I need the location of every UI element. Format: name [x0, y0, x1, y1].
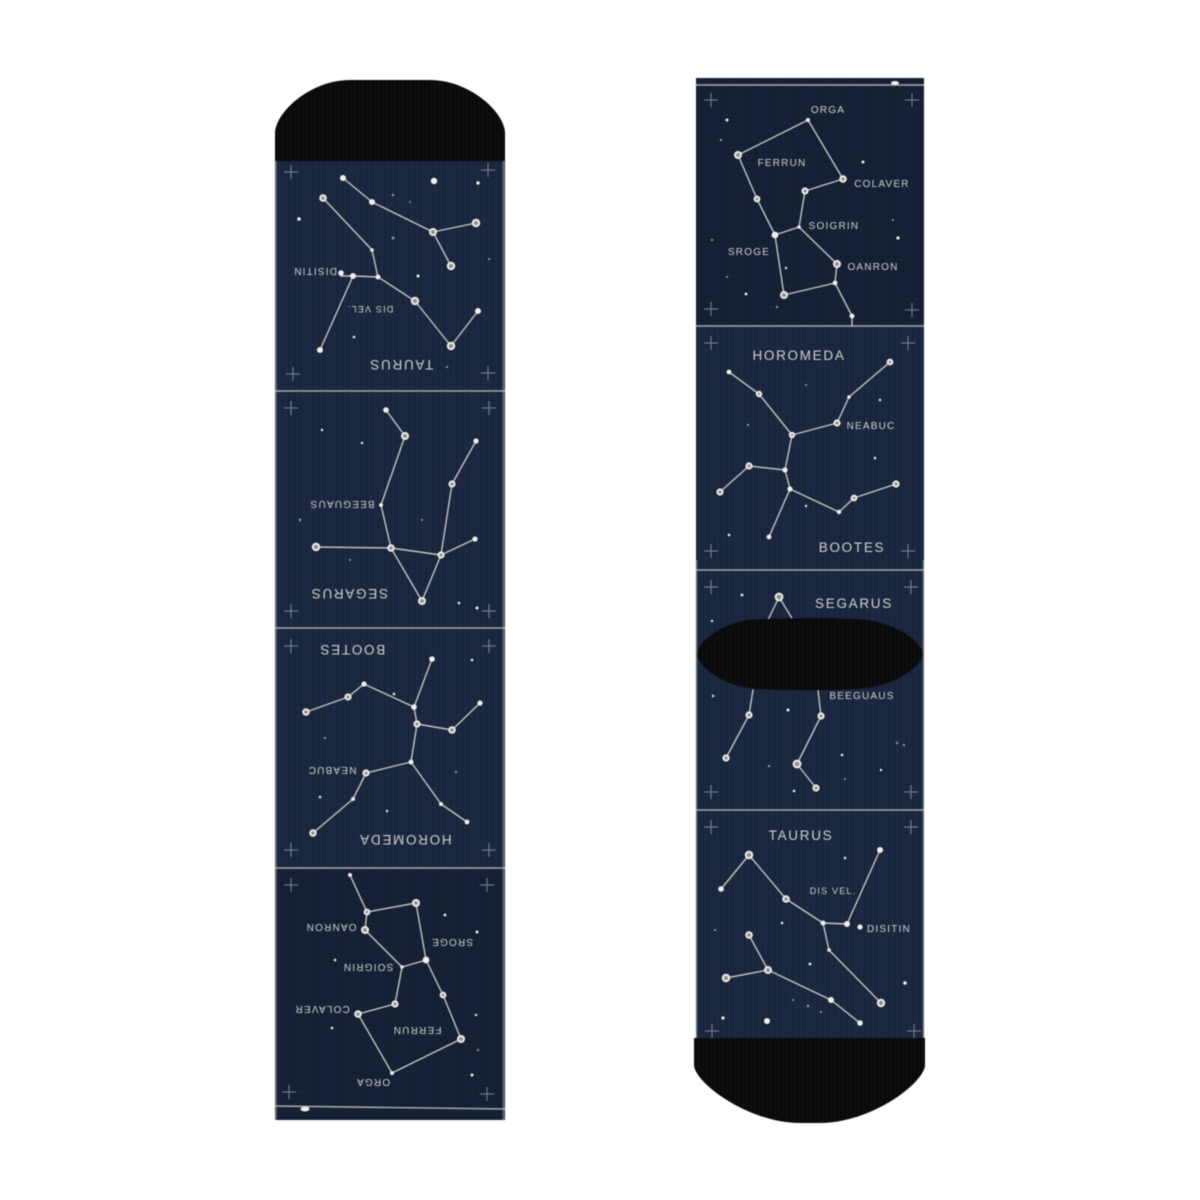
constellation panel: Orga (left sock): FERRUN	[393, 1024, 441, 1035]
constellation panel: Taurus (left sock): TAURUS	[369, 357, 433, 372]
alignment crosses: right sock	[704, 93, 921, 1038]
constellation panel: Taurus (right sock): DIS VEL.	[810, 886, 856, 896]
black toe cap: left sock	[275, 80, 505, 161]
constellation panel: Segarus (right sock): BEEGUAUS	[829, 691, 895, 702]
constellation panel: Orga (right sock): COLAVER	[854, 179, 910, 190]
constellation panel: Horomeda and Bootes (right sock): NEABUC	[847, 421, 895, 432]
constellation panel: Bootes and Horomeda (left sock): HOROMEDA	[358, 832, 452, 847]
sock: right, upright constellations	[694, 78, 925, 1123]
constellation panel: Taurus (left sock)	[293, 175, 490, 372]
constellation panel: Segarus (left sock)	[299, 407, 479, 610]
constellation panel: Horomeda and Bootes (right sock)	[717, 348, 899, 555]
black heel patch: right sock	[697, 618, 923, 690]
constellation panel: Segarus (left sock): BEEGUAUS	[309, 498, 375, 509]
sock: left, upside-down constellations	[275, 80, 505, 1120]
constellation panel: Bootes and Horomeda (left sock): NEABUC	[308, 764, 356, 775]
black toe cap: right sock	[694, 1038, 925, 1123]
constellation panel: Horomeda and Bootes (right sock): BOOTES	[819, 540, 885, 555]
constellation panel: Orga (left sock)	[294, 873, 479, 1087]
constellation panel: Orga (right sock): SROGE	[728, 247, 770, 258]
constellation panel: Segarus (left sock): SEGARUS	[310, 586, 388, 601]
constellation panel: Horomeda and Bootes (right sock): HOROMEDA	[752, 348, 846, 363]
constellation panel: Taurus (left sock): DISITIN	[293, 265, 337, 276]
constellation panel: Orga (left sock): OANRON	[305, 921, 357, 932]
constellation panel: Orga (left sock): SOIGRIN	[343, 961, 393, 972]
constellation panel: Orga (right sock): ORGA	[811, 105, 845, 116]
constellation panel: Taurus (right sock): TAURUS	[769, 828, 833, 843]
sock body: left	[275, 155, 505, 1120]
constellation panel: Bootes and Horomeda (left sock)	[303, 642, 483, 847]
constellation panel: Orga (right sock): FERRUN	[758, 158, 806, 169]
constellation panel: Orga (left sock): SROGE	[431, 936, 473, 947]
constellation panel: Taurus (left sock): DIS VEL.	[347, 304, 393, 314]
constellation panel: Taurus (right sock)	[714, 828, 911, 1026]
constellation panel: Segarus (right sock)	[711, 594, 905, 792]
constellation panel: Bootes and Horomeda (left sock): BOOTES	[319, 642, 385, 657]
constellation panel: Orga (left sock): COLAVER	[294, 1003, 350, 1014]
constellation panel: Orga (right sock): SOIGRIN	[809, 221, 859, 232]
alignment crosses: left sock	[282, 163, 496, 1101]
constellation panel: Orga (left sock): ORGA	[356, 1076, 390, 1087]
constellation panel: Orga (right sock): OANRON	[847, 262, 899, 273]
sock body: right	[696, 78, 924, 1043]
constellation panel: Orga (right sock)	[711, 105, 910, 326]
constellation panel: Segarus (right sock): SEGARUS	[815, 596, 893, 611]
constellation panel: Taurus (right sock): DISITIN	[867, 924, 911, 935]
